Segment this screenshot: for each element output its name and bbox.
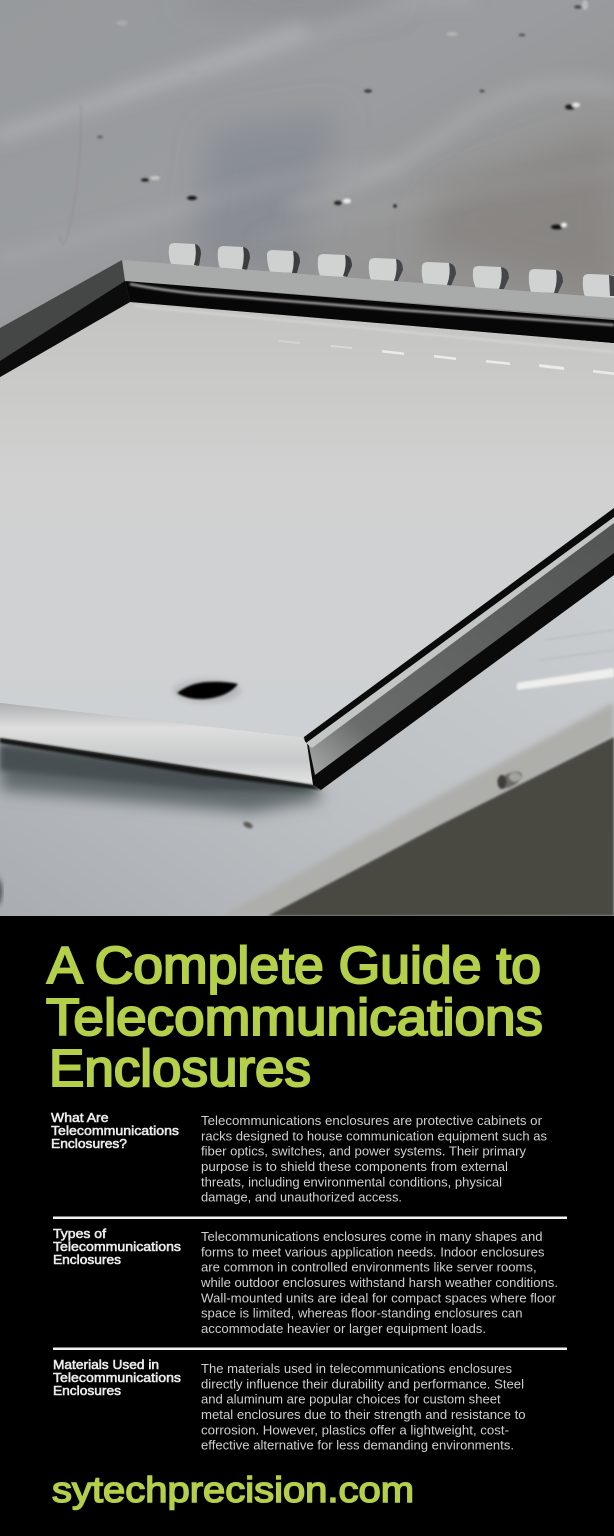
lower floor surface <box>0 500 614 916</box>
body text: forms to meet various application needs. Indoor enclosures <box>201 1244 545 1259</box>
section: materials used in telecommunications enclosures <box>53 1357 526 1453</box>
heading: Materials Used in <box>53 1357 159 1372</box>
heading <box>53 1357 181 1398</box>
gasket highlight <box>130 284 614 325</box>
taupe edge of the base <box>222 702 614 916</box>
body text: Telecommunications enclosures come in many shapes and <box>201 1229 542 1244</box>
body text: effective alternative for less demanding environments. <box>201 1438 514 1453</box>
heading <box>51 1110 179 1151</box>
title: Enclosures <box>49 1040 311 1098</box>
title: Telecommunications <box>46 989 543 1047</box>
black text panel <box>0 916 614 1536</box>
heading: Enclosures <box>53 1252 121 1267</box>
section: types of telecommunications enclosures <box>53 1226 558 1336</box>
top black gasket <box>125 281 614 343</box>
photo: sheet metal telecommunications enclosure <box>0 0 614 916</box>
section: what are telecommunications enclosures <box>51 1110 547 1205</box>
heading: What Are <box>51 1110 108 1125</box>
speck <box>242 820 254 830</box>
body text <box>201 1361 526 1453</box>
right flange: groove, silver face, black shadow <box>304 508 614 790</box>
body text: accommodate heavier or larger equipment loads. <box>201 1321 486 1336</box>
lip shadow line <box>0 738 321 790</box>
surface specks and rivets <box>97 0 588 229</box>
body text: purpose is to shield these components from external <box>201 1159 508 1174</box>
body text <box>201 1113 547 1205</box>
heading: Telecommunications <box>51 1123 179 1138</box>
body text: Wall-mounted units are ideal for compact spaces where floor <box>201 1290 557 1305</box>
body text: are common in controlled environments like server rooms, <box>201 1260 537 1275</box>
front lip of lid <box>0 703 313 785</box>
heading: Telecommunications <box>53 1239 181 1254</box>
row of stitched dashes <box>279 340 614 375</box>
clip tabs along the top rim <box>169 243 614 298</box>
embossed edge line of lid <box>135 306 614 352</box>
body text: while outdoor enclosures withstand harsh weather conditions. <box>200 1275 558 1290</box>
body text: space is limited, whereas floor-standing enclosures can <box>201 1306 522 1321</box>
highlight streak <box>517 668 614 690</box>
body text: metal enclosures due to their strength and resistance to <box>201 1407 526 1422</box>
body text: and aluminum are popular choices for custom sheet <box>201 1392 501 1407</box>
mounting hole <box>173 679 241 703</box>
dark base wedge <box>268 737 614 916</box>
body text: threats, including environmental conditions, physical <box>201 1174 502 1189</box>
title: A Complete Guide to <box>47 937 541 995</box>
body text <box>200 1229 558 1336</box>
body text: directly influence their durability and performance. Steel <box>201 1376 524 1391</box>
peg <box>495 768 525 792</box>
body text: damage, and unauthorized access. <box>201 1190 402 1205</box>
heading <box>53 1226 181 1267</box>
body text: fiber optics, switches, and power systems. Their primary <box>201 1144 527 1159</box>
left rim of enclosure <box>0 260 130 377</box>
heading: Telecommunications <box>53 1370 181 1385</box>
heading: Enclosures? <box>51 1136 127 1151</box>
heading: Types of <box>53 1226 106 1241</box>
website url: sytechprecision.com <box>52 1469 414 1510</box>
enclosure lid surface <box>0 302 614 737</box>
body text: Telecommunications enclosures are protective cabinets or <box>201 1113 543 1128</box>
left black gasket <box>0 281 130 377</box>
top rim of enclosure <box>122 260 614 318</box>
body text: corrosion. However, plastics offer a lightweight, cost- <box>201 1422 509 1437</box>
title <box>46 937 543 1098</box>
brushed metal surface <box>0 0 614 340</box>
heading: Enclosures <box>53 1383 121 1398</box>
body text: The materials used in telecommunications enclosures <box>201 1361 512 1376</box>
body text: racks designed to house communication equipment such as <box>201 1128 547 1143</box>
